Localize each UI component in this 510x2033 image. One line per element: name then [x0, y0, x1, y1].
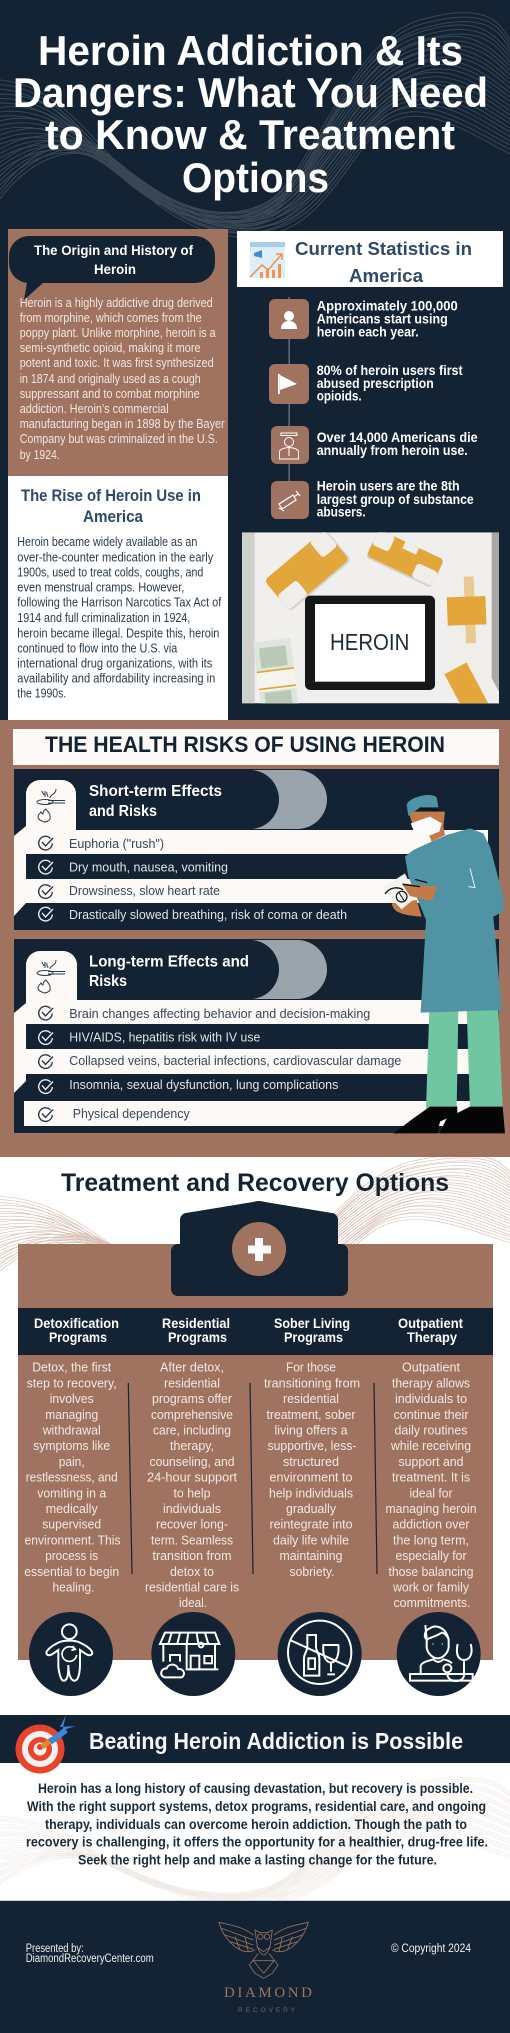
column: sober living: treatment, sober [266, 1407, 356, 1422]
statistics heading text: Current Statistics in [295, 238, 472, 259]
column: detoxification: pain, [59, 1454, 85, 1469]
decorative wave lines [0, 1777, 510, 1906]
title: Heroin Addiction & Its [38, 27, 463, 74]
origin paragraph: Heroin is a highly addictive drug derived [20, 296, 213, 310]
stat 4: largest group of substance [317, 492, 474, 507]
pill inner [240, 940, 279, 999]
logo wordmark: DIAMOND [224, 1985, 312, 2001]
treatment header band: Residential [162, 1315, 230, 1331]
column: sober living: gradually [286, 1501, 336, 1516]
column: outpatient: therapy allows [392, 1375, 470, 1390]
column: sober living: supportive, less- [268, 1438, 356, 1453]
treatment header band [18, 1308, 493, 1355]
long-term heading text [89, 954, 249, 990]
icon: no alcohol [278, 1612, 362, 1696]
panel: long-term effects [14, 939, 499, 1133]
speech bubble heading: The Origin and History of [34, 242, 193, 258]
column: detoxification: healing. [52, 1580, 94, 1594]
package 2 [366, 529, 444, 588]
header [0, 13, 510, 237]
treatment header band: Detoxification [34, 1315, 119, 1331]
banknotes [253, 638, 298, 709]
rise heading: America [83, 507, 143, 526]
rise paragraph: 1900s, used to treat colds, coughs, and [17, 566, 203, 580]
origin paragraph: from morphine, which comes from the [20, 311, 202, 325]
column: residential: to help [174, 1485, 210, 1500]
stat 4: abusers. [317, 505, 366, 520]
panel: short-term effects [14, 769, 499, 930]
checklist: Insomnia, sexual dysfunction, lung complications [69, 1077, 339, 1092]
column: sober living: transitioning from [264, 1375, 360, 1390]
package 4 [444, 662, 499, 704]
long-term heading text: Long-term Effects and [89, 954, 249, 971]
rise paragraph: Heroin became widely available as an [17, 535, 197, 549]
stat 2 [269, 363, 463, 404]
illustration: doctor with clipboard [382, 795, 505, 1133]
column: detoxification [24, 1360, 121, 1594]
column: outpatient: those balancing [388, 1564, 474, 1579]
treatment heading: Treatment and Recovery Options [61, 1169, 449, 1197]
logo: owl [219, 1922, 308, 1978]
short-term heading text: Short-term Effects [89, 783, 222, 800]
conclusion paragraph: Heroin has a long history of causing devastation, but recovery is possible. [38, 1781, 473, 1796]
column: sober living: reintegrate into [270, 1517, 352, 1532]
tablet [305, 596, 435, 690]
conclusion paragraph: therapy, individuals can overcome heroin addiction. Though the path to [45, 1817, 467, 1832]
rise paragraph: following the Harrison Narcotics Tax Act of [17, 596, 222, 610]
treatment panel background [18, 1244, 493, 1660]
checklist: HIV/AIDS, hepatitis risk with IV use [69, 1030, 260, 1045]
column: detoxification: withdrawal [42, 1422, 101, 1438]
column: residential: counseling, and [150, 1454, 234, 1469]
speech bubble heading: Heroin [94, 261, 136, 277]
rise heading [21, 486, 201, 526]
column: detoxification: restlessness, and [26, 1470, 118, 1485]
column: sober living: For those [286, 1360, 336, 1375]
origin paragraph: poppy plant. Unlike morphine, heroin is a [20, 326, 216, 340]
column: detoxification: essential to begin [24, 1564, 119, 1579]
column: residential: 24-hour support [147, 1470, 237, 1485]
checklist [39, 1006, 401, 1121]
rise paragraph: international drug organizations, with its [17, 656, 212, 670]
column: residential: residential care is [145, 1580, 239, 1594]
short-term heading text [89, 783, 222, 820]
package 3 [446, 576, 486, 644]
stat 1: Americans start using [317, 311, 448, 326]
section: health risks [0, 720, 510, 1157]
photo: heroin tablet and packages [242, 532, 499, 704]
column: detoxification: vomiting in a [37, 1485, 107, 1500]
conclusion banner: Beating Heroin Addiction is Possible [89, 1728, 463, 1754]
column: residential: residential [164, 1375, 220, 1390]
rise paragraph: availability and affordability increasing in [17, 672, 215, 686]
column: residential: recover long- [156, 1517, 228, 1532]
title [13, 27, 488, 201]
decorative wave lines [0, 1157, 510, 1271]
tablet: HEROIN [330, 629, 409, 655]
treatment header band: Outpatient [398, 1315, 463, 1331]
origin paragraph [20, 296, 225, 462]
treatment header band: Therapy [407, 1329, 457, 1345]
statistics heading text [295, 238, 472, 286]
column: residential: therapy, [170, 1438, 214, 1453]
column: outpatient: especially for [396, 1548, 467, 1563]
column: residential [145, 1360, 239, 1610]
stat 4: Heroin users are the 8th [317, 479, 460, 494]
checklist: Drowsiness, slow heart rate [69, 883, 220, 898]
treatment header band: Programs [49, 1329, 107, 1345]
column: outpatient: work or family [392, 1580, 469, 1594]
column: outpatient: support and [398, 1454, 464, 1469]
stat 3: Over 14,000 Americans die [317, 430, 478, 445]
column: detoxification: involves [50, 1391, 94, 1406]
stat 2: abused prescription [317, 376, 434, 391]
presented by: Presented by: [26, 1943, 84, 1955]
column: outpatient: ideal for [410, 1485, 453, 1500]
column: outpatient: daily routines [394, 1422, 468, 1438]
origin paragraph: suppressant and to combat morphine [20, 387, 200, 401]
panel: origin and history [8, 229, 228, 476]
column: sober living: sobriety. [290, 1564, 334, 1579]
column: outpatient: managing heroin [386, 1501, 476, 1516]
presented by [26, 1943, 154, 1965]
column: residential: term. Seamless [151, 1532, 233, 1547]
stat 1 [269, 299, 458, 339]
rise paragraph [17, 535, 222, 701]
checklist: Euphoria ("rush") [69, 836, 164, 851]
column: residential: transition from [152, 1548, 232, 1563]
rise paragraph: the 1990s. [17, 687, 66, 701]
stat 1: Approximately 100,000 [317, 299, 458, 314]
title: Dangers: What You Need [13, 69, 488, 116]
checklist [39, 836, 347, 922]
conclusion paragraph: Seek the right help and make a lasting change for the future. [78, 1853, 437, 1868]
column: detoxification: medically [46, 1501, 98, 1516]
column: outpatient: treatment. It is [392, 1470, 470, 1485]
treatment header band: Sober Living [274, 1315, 350, 1331]
rise paragraph: 1914 and full criminalization in 1924, [17, 611, 190, 625]
column: sober living: living offers a [274, 1422, 348, 1438]
column: detoxification: Detox, the first [32, 1360, 112, 1375]
stat 3 [271, 426, 478, 464]
stat 2: opioids. [317, 389, 362, 404]
section: conclusion [0, 1715, 510, 1906]
column: detoxification: symptoms like [33, 1438, 110, 1453]
presented by: DiamondRecoveryCenter.com [26, 1953, 154, 1965]
logo wordmark: RECOVERY [238, 2007, 296, 2014]
rise paragraph: over-the-counter medication in the early [17, 550, 214, 564]
icon: target with dart [16, 1715, 75, 1774]
column: detoxification: supervised [42, 1517, 101, 1532]
logo wordmark [224, 1985, 312, 2014]
rise paragraph: continued to flow into the U.S. via [17, 641, 177, 655]
column: residential: programs offer [152, 1391, 233, 1406]
icon tab [26, 780, 76, 831]
title: to Know & Treatment [45, 111, 455, 158]
column: residential: After detox, [160, 1360, 224, 1375]
icon tab [26, 951, 77, 1001]
stat 2: 80% of heroin users first [317, 363, 463, 378]
column: outpatient: addiction over [392, 1517, 470, 1532]
origin paragraph: potent and toxic. It was first synthesized [20, 356, 214, 370]
package 1 [264, 529, 352, 612]
rise paragraph: heroin became illegal. Despite this, heroin [17, 626, 219, 640]
footer [0, 1900, 510, 2033]
statistics heading text: America [349, 265, 424, 286]
conclusion paragraph [26, 1781, 488, 1868]
column: outpatient: commitments. [394, 1595, 470, 1610]
icon: growth chart [250, 242, 285, 278]
column: detoxification: managing [45, 1407, 98, 1422]
icon: body with recovery arrow [29, 1612, 113, 1696]
stat 4 [271, 479, 474, 520]
treatment header band: Programs [168, 1329, 227, 1345]
column: sober living: environment to [270, 1470, 352, 1485]
treatment header band: Programs [284, 1329, 343, 1345]
white corner band [14, 826, 26, 916]
rise heading: The Rise of Heroin Use in [21, 486, 201, 505]
long-term heading text: Risks [89, 973, 127, 990]
origin paragraph: by 1924. [20, 448, 60, 462]
icon: outpatient therapy doctor [397, 1612, 481, 1696]
health risks heading [13, 729, 499, 765]
column: sober living: daily life while [273, 1532, 349, 1547]
title: Options [182, 154, 329, 201]
statistics timeline [269, 297, 478, 520]
icon: hospital with cross [171, 1201, 348, 1296]
origin paragraph: semi-synthetic opioid, making it more [20, 341, 201, 355]
column: outpatient: continue their [394, 1407, 469, 1422]
column: detoxification: step to recovery, [27, 1375, 117, 1390]
column: detoxification: environment. This [24, 1532, 121, 1547]
stat 3: annually from heroin use. [317, 443, 468, 458]
copyright: © Copyright 2024 [391, 1943, 472, 1955]
column: sober living: maintaining [280, 1548, 342, 1563]
checklist: Physical dependency [73, 1106, 190, 1121]
rise paragraph: even menstrual cramps. However, [17, 580, 184, 594]
checklist: Collapsed veins, bacterial infections, cardiovascular damage [69, 1053, 401, 1068]
column: sober living [264, 1360, 360, 1579]
conclusion banner [0, 1715, 510, 1763]
column: outpatient: while receiving [390, 1438, 471, 1453]
panel: rise of heroin use [8, 476, 228, 720]
health risks heading: THE HEALTH RISKS OF USING HEROIN [45, 732, 445, 757]
origin paragraph: Company but was criminalized in the U.S. [20, 432, 218, 446]
column: outpatient: individuals to [395, 1391, 467, 1406]
decorative wave lines [0, 13, 510, 237]
pill inner [240, 770, 279, 829]
checklist: Brain changes affecting behavior and decision-making [69, 1006, 370, 1021]
column: residential: detox to [170, 1564, 214, 1579]
white corner band [14, 1003, 26, 1093]
column: residential: individuals [163, 1501, 221, 1516]
stat 1: heroin each year. [317, 324, 419, 339]
checklist: Dry mouth, nausea, vomiting [69, 860, 228, 875]
checklist: Drastically slowed breathing, risk of coma or death [69, 907, 347, 922]
section: treatment and recovery [0, 1155, 510, 1715]
column: outpatient [386, 1360, 476, 1610]
column: sober living: help individuals [269, 1485, 353, 1500]
column: residential: ideal. [179, 1595, 207, 1610]
column: outpatient: the long term, [393, 1532, 469, 1547]
panel: current statistics heading [237, 231, 503, 287]
icon: residential house [151, 1612, 235, 1696]
short-term heading text: and Risks [89, 803, 157, 820]
column: outpatient: Outpatient [402, 1360, 460, 1375]
origin paragraph: manufacturing began in 1898 by the Bayer [20, 417, 225, 431]
column: residential: comprehensive [151, 1407, 233, 1422]
column: detoxification: process is [45, 1548, 99, 1563]
origin paragraph: addiction. Heroin's commercial [20, 402, 169, 416]
conclusion paragraph: recovery is challenging, it offers the opportunity for a healthier, drug-free life. [26, 1835, 488, 1850]
column: sober living: residential [283, 1391, 339, 1406]
pill heading shape [253, 940, 327, 999]
column: sober living: structured [283, 1454, 339, 1469]
pill heading shape [253, 770, 327, 829]
origin paragraph: in 1874 and originally used as a cough [20, 372, 201, 386]
speech bubble heading [9, 236, 215, 300]
column: residential: care, including [153, 1422, 231, 1438]
